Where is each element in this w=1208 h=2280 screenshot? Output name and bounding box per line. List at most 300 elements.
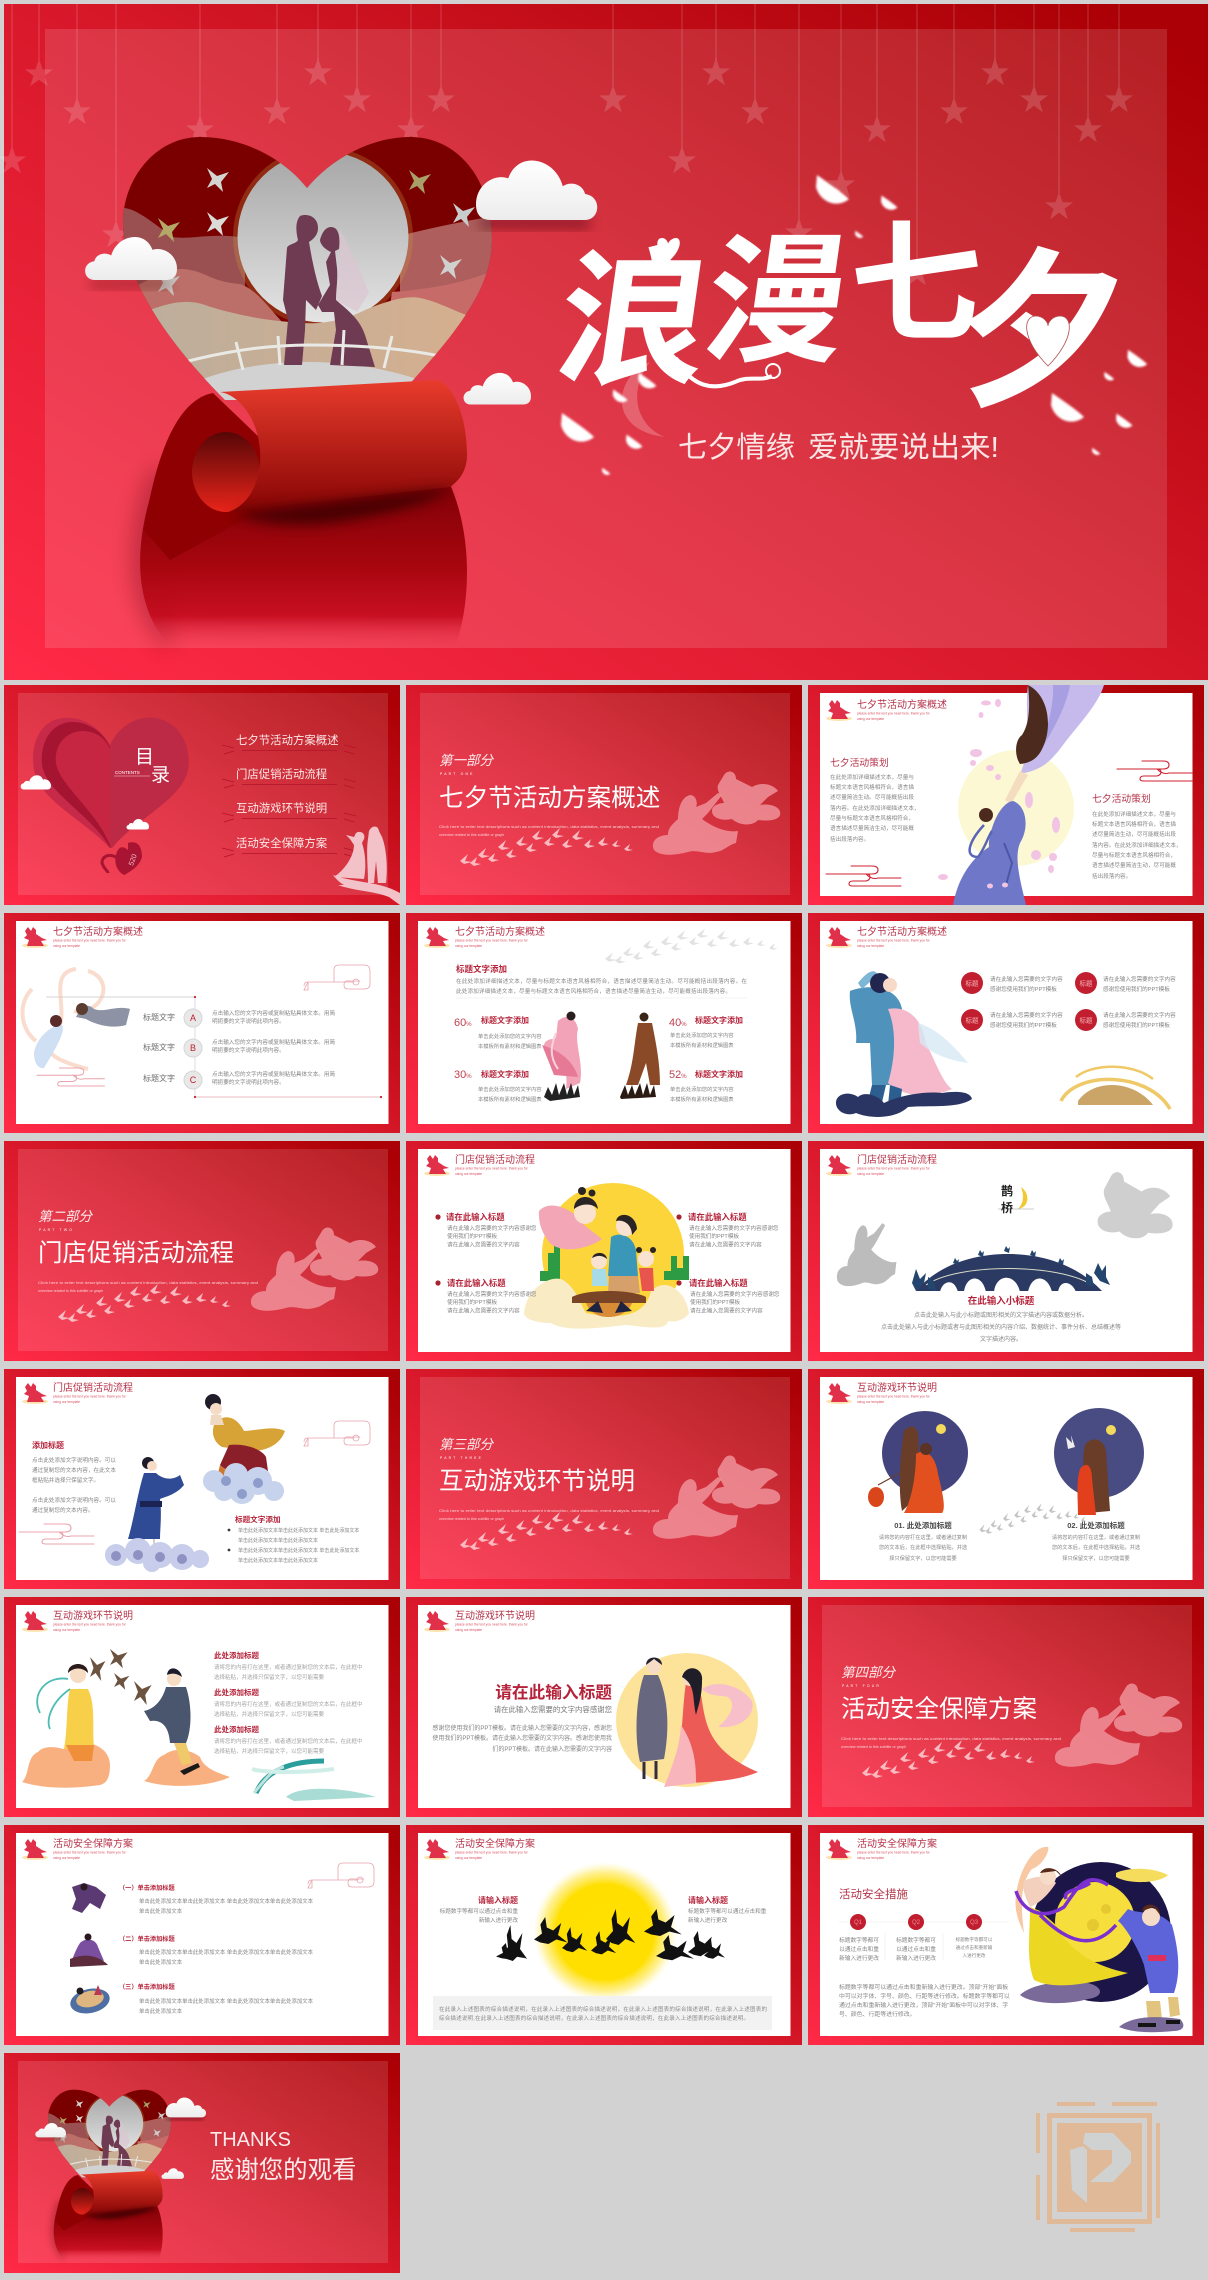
header: 互动游戏环节说明 (857, 1381, 937, 1394)
header: please enter the text you need here. thank you for (53, 1622, 127, 1626)
section description: overview related to this subtitle or graph (439, 833, 504, 837)
section description: overview related to this subtitle or graph (38, 1289, 103, 1293)
left label: 标题数字等都可以通过点击和重 (440, 1907, 518, 1915)
item top right: 标题 (1080, 978, 1093, 988)
right bullet list: 单击此处添加文本单击此处添加文本 单击此处添加文本 (238, 1547, 359, 1554)
text items: 请将您的内容打在这里，或者通过复制您的文本后，在此框中 (214, 1737, 363, 1745)
right text block (1092, 792, 1182, 880)
item bottom left (961, 1009, 1063, 1031)
section label: 第四部分 (841, 1665, 896, 1680)
frame (808, 1141, 1204, 1361)
paragraph (839, 1983, 1010, 2018)
flying couple illustration (22, 969, 130, 1069)
left label (440, 1895, 518, 1924)
birds between moons (979, 1503, 1087, 1534)
slide: 添加标题 (4, 1369, 400, 1589)
scroll ornaments (37, 965, 370, 1086)
item bottom right: 感谢您使用我们的PPT模板 (1103, 1021, 1170, 1029)
item B: 明扼要的文字说明此项内容。 (212, 1046, 285, 1054)
bridge paragraph: 文字描述内容。 (980, 1335, 1022, 1343)
left text block: 点击此处添加文字说明内容。可以 (32, 1496, 116, 1504)
item bottom left: 使用我们的PPT模板 (447, 1298, 497, 1306)
header (424, 925, 545, 948)
item top right: 请在此输入标题 (688, 1212, 747, 1222)
caption 02: 择只保留文字，以您可能需要 (1062, 1554, 1130, 1562)
paragraph: 标题数字等都可以通过点击和重新输入进行更改。顶部"开始"面板 (839, 1983, 1008, 1991)
frame (4, 2053, 400, 2273)
Q1 Q2 Q3 steps: 新输入进行更改 (896, 1954, 936, 1962)
slide: part three section (406, 1369, 802, 1589)
weaver girl figure (542, 1012, 581, 1101)
bridge paragraph (881, 1311, 1121, 1343)
section description: Click here to enter text descriptions such as content introduction, data statistics, event analysis, summary and (439, 825, 659, 829)
hero subtitle: 爱就要说出来! (808, 431, 999, 464)
right label: 标题数字等都可以通过点击和重 (688, 1907, 767, 1915)
item two (70, 1934, 314, 1967)
Q1 Q2 Q3 steps: 以通过点击和重 (839, 1945, 879, 1953)
item one: 单击此处添加文本单击此处添加文本 单击此处添加文本单击此处添加文本 (139, 1897, 314, 1905)
header: using our template (455, 1856, 482, 1860)
caption 02 (1052, 1520, 1140, 1562)
paragraph: 们的PPT模板。请在此输入您需要的文字内容 (492, 1745, 612, 1753)
item B: 标题文字 (143, 1042, 175, 1052)
item top left: 使用我们的PPT模板 (447, 1232, 497, 1240)
main title 浪漫七夕: 七 (850, 211, 982, 358)
item top left: 请在此输入您需要的文字内容 (447, 1240, 520, 1248)
contents menu: 互动游戏环节说明 (236, 801, 327, 815)
main title 浪漫七夕: 漫 (696, 224, 858, 380)
golden bridge (1061, 1067, 1170, 1109)
stat 30%: 单击此处添加您的文字内容 (478, 1085, 542, 1093)
caption 01: 请将您的内容打在这里，或者通过复制 (879, 1533, 967, 1541)
slide: 活动安全措施 (808, 1825, 1204, 2045)
frame (406, 1141, 802, 1361)
section description: overview related to this subtitle or graph (841, 1745, 906, 1749)
item bottom right (676, 1278, 780, 1314)
header: using our template (857, 1400, 884, 1404)
paragraph: 号、颜色、行距等进行修改。 (839, 2010, 916, 2018)
header: 七夕节活动方案概述 (857, 925, 947, 938)
section description: overview related to this subtitle or graph (439, 1517, 504, 1521)
stat 40%: 标题文字添加 (695, 1015, 743, 1025)
header: 活动安全保障方案 (857, 1837, 937, 1850)
section description: Click here to enter text descriptions such as content introduction, data statistics, event analysis, summary and (38, 1281, 258, 1285)
part number: PART THREE (440, 1456, 483, 1460)
stat 30%: 标题文字添加 (481, 1069, 529, 1079)
grey note box (433, 1996, 772, 2030)
left text block: 标题文本语言风格相符合，语言描 (830, 783, 914, 791)
header: using our template (53, 1628, 80, 1632)
stat 52%: 本模板所有素材和逻辑图表 (670, 1095, 734, 1103)
paragraph: 通过点击和重新输入进行更改，顶部"开始"面板中可以对字体、字 (839, 2001, 1008, 2009)
item B (143, 1038, 335, 1057)
part number: PART TWO (39, 1228, 74, 1232)
section label: 第二部分 (38, 1209, 93, 1224)
Q1 Q2 Q3 steps: 通过点击和重新输 (956, 1944, 993, 1951)
header (22, 1609, 133, 1632)
item top left (435, 1212, 537, 1248)
left label: 新输入进行更改 (479, 1916, 518, 1924)
falling petals (561, 175, 1147, 475)
intro text: 标题文字添加 (456, 964, 507, 974)
header: using our template (53, 1856, 80, 1860)
stat 52%: 标题文字添加 (695, 1069, 743, 1079)
stat 30% (454, 1069, 542, 1103)
left text block: 通过复制您的文本内容。 (32, 1506, 94, 1514)
slide: magpie bridge (808, 1141, 1204, 1361)
item three: （三）单击添加标题 (119, 1983, 175, 1991)
silhouettes and birds (460, 1456, 780, 1550)
grey silhouettes (837, 1172, 1173, 1286)
frame (406, 1369, 802, 1589)
header (826, 925, 947, 948)
item A: A (190, 1013, 196, 1023)
header: please enter the text you need here. thank you for (455, 938, 529, 942)
left text block: 落内容。在此处添加详细描述文本， (830, 804, 920, 812)
silhouettes and birds (58, 1228, 378, 1322)
Q1 Q2 Q3 steps: 以通过点击和重 (896, 1945, 936, 1953)
frame (808, 1597, 1204, 1817)
item bottom right: 标题 (1080, 1016, 1093, 1024)
item B: B (190, 1043, 196, 1053)
family on bridge illustration (524, 1183, 689, 1329)
contents menu: 活动安全保障方案 (236, 836, 328, 850)
bridge paragraph: 点击此处输入与此小标题或者与此图形相关的内容介绍、数据统计、事件分析、总结概述等 (881, 1323, 1121, 1331)
crescent moon (622, 362, 665, 437)
item two: 单击此处添加文本 (139, 1958, 183, 1966)
main title 浪漫七夕: 夕 (946, 236, 1138, 429)
birds over branches (90, 1649, 152, 1705)
right text block: 括出段落内容。 (1092, 872, 1131, 880)
frame (4, 685, 400, 905)
section title: 门店促销活动流程 (38, 1239, 234, 1267)
Q1 Q2 Q3 steps: 标题数字等都可 (839, 1936, 879, 1944)
stat 60%: 标题文字添加 (481, 1015, 529, 1025)
item top left (961, 972, 1063, 994)
teal bridge (252, 1761, 376, 1801)
Q1 Q2 Q3 steps: 标题数字等都可以 (956, 1936, 993, 1943)
header: using our template (857, 1172, 884, 1176)
caption 02: 您的文本后，在此框中选择粘贴，并选 (1052, 1543, 1140, 1551)
watermark stamp (1038, 2104, 1158, 2230)
frame (808, 913, 1204, 1133)
man on orange cloud (144, 1668, 230, 1786)
item two: 单击此处添加文本单击此处添加文本 单击此处添加文本单击此处添加文本 (139, 1948, 314, 1956)
section label: 第一部分 (439, 753, 494, 768)
stat 30%: 30% (454, 1069, 472, 1081)
bridge illustration (912, 1246, 1110, 1292)
girl on orange cloud (22, 1664, 110, 1788)
header: please enter the text you need here. thank you for (455, 1850, 529, 1854)
grey note box: 在此录入上述图表的综合描述说明，在此录入上述图表的综合描述说明，在此录入上述图表的综合描述说明，在此录入上述图表的 (439, 2005, 767, 2013)
contents menu: 门店促销活动流程 (236, 767, 327, 781)
header: please enter the text you need here. thank you for (857, 1166, 931, 1170)
right text block: 在此处添加详细描述文本，尽量与 (1092, 810, 1176, 818)
item top right: 感谢您使用我们的PPT模板 (1103, 985, 1170, 993)
slide: two moons (808, 1369, 1204, 1589)
item top left: 请在此输入您需要的文字内容感谢您 (447, 1224, 537, 1232)
paragraph: 感谢您使用我们的PPT模板。请在此输入您需要的文字内容，感谢您 (432, 1724, 612, 1732)
header (826, 1153, 937, 1176)
header: please enter the text you need here. thank you for (455, 1622, 529, 1626)
frame (808, 1369, 1204, 1589)
slide: clouds and bridge (4, 1597, 400, 1817)
stat 40%: 本模板所有素材和逻辑图表 (670, 1041, 734, 1049)
slide: four items around family (406, 1141, 802, 1361)
intro text: 此处添加详细描述文本，尽量与标题文本语言风格相符合，语言描述尽量简洁生动，尽可能概括出段落内容。 (456, 987, 731, 995)
header (22, 1837, 133, 1860)
item top left: 感谢您使用我们的PPT模板 (990, 985, 1057, 993)
small clouds (21, 775, 149, 830)
right moon couple (1054, 1408, 1144, 1515)
heart with couple, scroll ribbon and clouds (85, 130, 597, 650)
frame (406, 685, 802, 905)
item bottom left: 标题 (966, 1016, 979, 1024)
Q1 Q2 Q3 steps (839, 1914, 1008, 1962)
item C: 标题文字 (143, 1073, 175, 1083)
slide: cranes over the sun (406, 1825, 802, 2045)
part number: PART ONE (440, 772, 475, 776)
slide: 七夕活动策划 (808, 685, 1204, 905)
item bottom right: 请在此输入您需要的文字内容 (1103, 1011, 1176, 1019)
stat 52% (669, 1069, 743, 1103)
left text block: 语言描述尽量简洁生动，尽可能概 (830, 824, 914, 832)
right label: 请输入标题 (688, 1895, 728, 1905)
couple silhouette on bridge (333, 826, 400, 905)
stat 52%: 单击此处添加您的文字内容 (670, 1085, 734, 1093)
intro text (456, 964, 747, 998)
right label: 新输入进行更改 (688, 1916, 728, 1924)
text items: 请将您的内容打在这里，或者通过复制您的文本后，在此框中 (214, 1700, 363, 1708)
scroll ornament (308, 1863, 374, 1888)
header (826, 1837, 937, 1860)
Q1 Q2 Q3 steps: 入进行更改 (963, 1952, 986, 1959)
right bullet list: 标题文字添加 (235, 1514, 281, 1524)
section description: Click here to enter text descriptions such as content introduction, data statistics, event analysis, summary and (841, 1737, 1061, 1741)
header: 门店促销活动流程 (455, 1153, 535, 1166)
text items: 此处添加标题 (214, 1724, 259, 1734)
slide: 请在此输入标题 (406, 1597, 802, 1817)
item B: 点击输入您的文字内容或复制粘贴具体文本。用简 (212, 1038, 335, 1046)
item one (72, 1883, 314, 1915)
item top right: 请在此输入您需要的文字内容感谢您 (689, 1224, 779, 1232)
frame (4, 1597, 400, 1817)
text items (214, 1650, 363, 1755)
header: using our template (857, 944, 884, 948)
item one: 单击此处添加文本 (139, 1907, 183, 1915)
item bottom right: 使用我们的PPT模板 (690, 1298, 740, 1306)
header: 门店促销活动流程 (53, 1381, 133, 1394)
text items: 此处添加标题 (214, 1650, 259, 1660)
caption 01 (879, 1520, 967, 1562)
item bottom right: 请在此输入您需要的文字内容感谢您 (690, 1290, 780, 1298)
left text block: 七夕活动策划 (830, 756, 889, 769)
header (424, 1609, 535, 1632)
caption 01: 您的文本后，在此框中选择粘贴，并选 (879, 1543, 967, 1551)
hero subtitle (678, 431, 999, 464)
hero slide: 浪漫七夕 cover (0, 4, 1208, 680)
heading: 请在此输入标题 (495, 1682, 612, 1702)
contents heading: 目 (135, 747, 154, 768)
item bottom right (1075, 1009, 1176, 1031)
header (22, 1381, 133, 1404)
item top left: 标题 (966, 978, 979, 988)
header: please enter the text you need here. thank you for (857, 1850, 931, 1854)
contents menu: 七夕节活动方案概述 (236, 733, 339, 747)
frame (406, 913, 802, 1133)
left text block (830, 756, 920, 843)
frame (406, 1597, 802, 1817)
Q1 Q2 Q3 steps: Q3 (970, 1920, 979, 1926)
item top right: 请在此输入您需要的文字内容 (1103, 975, 1176, 983)
pale birds (605, 929, 778, 964)
item top right (1075, 972, 1176, 994)
header: using our template (857, 717, 884, 721)
left text block (32, 1440, 116, 1514)
item C: 点击输入您的文字内容或复制粘贴具体文本。用简 (212, 1070, 335, 1078)
header: 七夕节活动方案概述 (455, 925, 545, 938)
part number: PART FOUR (842, 1684, 881, 1688)
text items: 选择粘贴，并选择只保留文字，以您可能需要 (214, 1747, 325, 1755)
section title: 互动游戏环节说明 (439, 1467, 635, 1495)
right bullet list: 单击此处添加文本单击此处添加文本 (238, 1557, 318, 1564)
contents heading: CONTENTS (115, 770, 140, 775)
paragraph: 使用我们的PPT模板。请在此输入您需要的文字内容。感谢您使用我 (432, 1734, 612, 1742)
header: please enter the text you need here. thank you for (857, 1394, 931, 1398)
slide: table of contents (4, 685, 400, 905)
contents menu (236, 733, 339, 850)
item three (68, 1983, 314, 2017)
item three: 单击此处添加文本单击此处添加文本 单击此处添加文本单击此处添加文本 (139, 1997, 314, 2005)
stat 40%: 单击此处添加您的文字内容 (670, 1031, 734, 1039)
frame (808, 1825, 1204, 2045)
header: 活动安全保障方案 (53, 1837, 133, 1850)
Q1 Q2 Q3 steps: 新输入进行更改 (839, 1954, 879, 1962)
silhouettes and birds (862, 1684, 1182, 1778)
stat 30%: 本模板所有素材和逻辑图表 (478, 1095, 542, 1103)
text items: 此处添加标题 (214, 1687, 259, 1697)
moon (958, 750, 1074, 866)
slide: couple with four items (808, 913, 1204, 1133)
stat 40% (669, 1015, 743, 1049)
frame (406, 1825, 802, 2045)
left text block: 框粘贴并选择只保留文字。 (32, 1476, 99, 1484)
left text block: 添加标题 (32, 1440, 64, 1450)
item top left: 请在此输入标题 (446, 1212, 505, 1222)
glowing sun (533, 1862, 677, 2002)
item top right (676, 1212, 779, 1248)
header: 互动游戏环节说明 (455, 1609, 535, 1622)
left text block: 括出段落内容。 (830, 835, 869, 843)
section description (841, 1737, 1061, 1749)
header: 活动安全保障方案 (455, 1837, 535, 1850)
header: using our template (455, 944, 482, 948)
header: using our template (53, 944, 80, 948)
heading: 活动安全措施 (839, 1887, 908, 1901)
item one: （一）单击添加标题 (119, 1884, 175, 1892)
black cranes (496, 1909, 725, 1961)
header: please enter the text you need here. thank you for (53, 938, 127, 942)
Q1 Q2 Q3 steps: 标题数字等都可 (896, 1936, 936, 1944)
embracing couple illustration (836, 971, 972, 1117)
header: 互动游戏环节说明 (53, 1609, 133, 1622)
item top right: 请在此输入您需要的文字内容 (689, 1240, 762, 1248)
thanks message: 感谢您的观看 (210, 2157, 356, 2184)
man on cloud illustration (105, 1457, 209, 1572)
header: please enter the text you need here. thank you for (857, 712, 931, 716)
right bullet list: 单击此处添加文本单击此处添加文本 单击此处添加文本 (238, 1527, 359, 1534)
header (424, 1153, 535, 1176)
header (424, 1837, 535, 1860)
timeline lines (46, 996, 382, 1098)
slide: three safety items (4, 1825, 400, 2045)
header: 七夕节活动方案概述 (857, 698, 947, 711)
left text block: 点击此处添加文字说明内容。可以 (32, 1456, 116, 1464)
frame (4, 1141, 400, 1361)
caption 02: 02. 此处添加标题 (1067, 1520, 1125, 1530)
magpie bridge calligraphy: 鹊 (1001, 1183, 1013, 1198)
Q1 Q2 Q3 steps: Q2 (912, 1920, 921, 1926)
section title: 七夕节活动方案概述 (439, 784, 660, 812)
header (22, 925, 143, 948)
contents heart (33, 717, 189, 875)
header: using our template (857, 1856, 884, 1860)
frame (808, 685, 1204, 905)
right text block: 落内容。在此处添加详细描述文本， (1092, 841, 1182, 849)
menu ornaments (222, 745, 356, 857)
paragraph: 中可以对字体、字号、颜色、行距等进行修改。标题数字等都可以 (839, 1992, 1010, 2000)
fairy and cowherd illustration (938, 685, 1104, 905)
text items: 请将您的内容打在这里，或者通过复制您的文本后，在此框中 (214, 1663, 363, 1671)
hero frame (4, 4, 1208, 680)
silhouettes and birds (460, 772, 780, 866)
item bottom left: 请在此输入您需要的文字内容感谢您 (447, 1290, 537, 1298)
stat 60%: 单击此处添加您的文字内容 (478, 1032, 542, 1040)
stat 60%: 本模板所有素材和逻辑图表 (478, 1042, 542, 1050)
right text block: 七夕活动策划 (1092, 792, 1151, 805)
Q1 Q2 Q3 steps: Q1 (854, 1920, 863, 1926)
section description (439, 1509, 659, 1521)
item bottom left: 请在此输入您需要的文字内容 (447, 1306, 520, 1314)
slide: thanks (4, 2053, 400, 2273)
subheading: 请在此输入您需要的文字内容感谢您 (494, 1705, 612, 1714)
contents heading: 录 (151, 765, 170, 786)
header: please enter the text you need here. thank you for (455, 1166, 529, 1170)
mini heart and scroll (35, 2087, 206, 2261)
item two: （二）单击添加标题 (119, 1935, 175, 1943)
header: please enter the text you need here. thank you for (53, 1850, 127, 1854)
header: 七夕节活动方案概述 (53, 925, 143, 938)
slide: ABC overview (4, 913, 400, 1133)
stat 52%: 52% (669, 1069, 687, 1081)
frame (4, 1369, 400, 1589)
main title 浪漫七夕: 浪 (548, 237, 721, 404)
section description (439, 825, 659, 837)
left text block: 在此处添加详细描述文本，尽量与 (830, 773, 914, 781)
item C (143, 1070, 335, 1089)
red cloud ornaments (826, 761, 1192, 886)
contents heart: 520 (128, 853, 139, 867)
scroll ornaments (19, 1421, 370, 1544)
item bottom left (435, 1278, 537, 1314)
THANKS label: THANKS (210, 2129, 291, 2151)
item top right: 使用我们的PPT模板 (689, 1232, 739, 1240)
section description: Click here to enter text descriptions such as content introduction, data statistics, event analysis, summary and (439, 1509, 659, 1513)
text items: 选择粘贴，并选择只保留文字，以您可能需要 (214, 1673, 325, 1681)
left text block: 述尽量简洁生动。尽可能概括出段 (830, 793, 914, 801)
section description (38, 1281, 258, 1293)
paragraph (432, 1724, 612, 1753)
